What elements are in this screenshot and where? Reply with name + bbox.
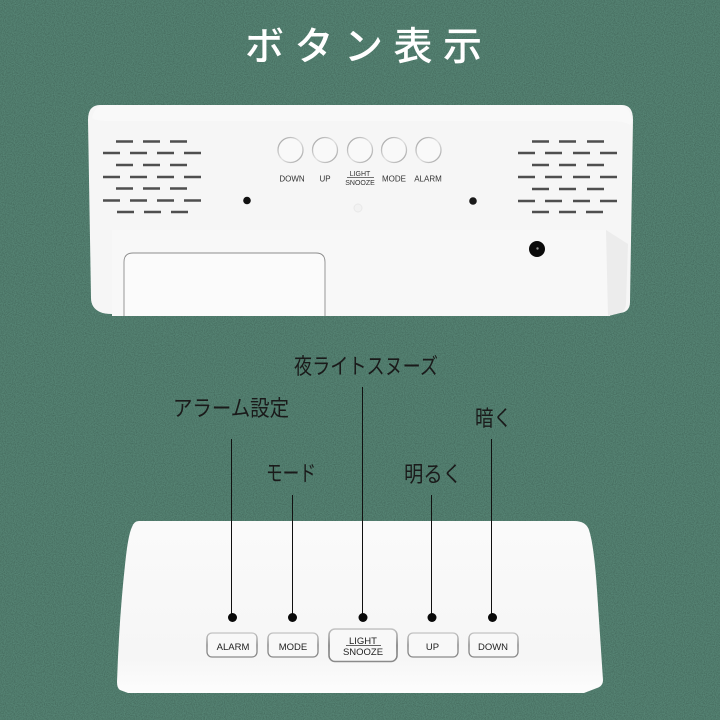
button: down: DOWN <box>478 642 508 653</box>
device body <box>117 521 603 693</box>
title: ボタン表示 <box>245 26 482 69</box>
speaker grille left <box>103 142 201 212</box>
button labels: DOWN <box>279 174 305 184</box>
button: mode <box>268 633 318 657</box>
button: alarm: ALARM <box>217 642 249 653</box>
button: mode: MODE <box>279 642 307 653</box>
small hole left <box>243 197 251 204</box>
power jack <box>529 241 545 257</box>
button labels: SNOOZE <box>345 180 375 187</box>
battery door <box>124 253 325 316</box>
callout dots <box>228 613 497 622</box>
label: bright: 明るく <box>404 462 462 487</box>
label: mode: モード <box>266 461 316 486</box>
button labels: ALARM <box>414 174 442 184</box>
button labels: MODE <box>382 174 406 184</box>
label: alarm setting: アラーム設定 <box>173 396 289 421</box>
panel: clock top view <box>117 521 603 693</box>
label: night light snooze: 夜ライトスヌーズ <box>294 354 438 379</box>
button: up: UP <box>426 642 439 653</box>
device body <box>88 105 633 316</box>
label: dark: 暗く <box>475 406 512 431</box>
panel: clock back view <box>88 105 633 316</box>
button: alarm <box>207 633 257 657</box>
speaker grille right <box>518 142 617 212</box>
button labels: LIGHT <box>350 171 371 178</box>
round buttons <box>278 138 441 162</box>
button: light snooze: SNOOZE <box>343 647 383 658</box>
small hole right <box>469 197 477 205</box>
button: light snooze <box>329 629 397 662</box>
lower stand <box>112 230 610 316</box>
button labels: UP <box>319 174 331 184</box>
button: up <box>408 633 458 657</box>
callout lines <box>232 387 492 617</box>
button: down <box>469 633 518 657</box>
light sensor <box>354 204 362 212</box>
button labels <box>279 171 442 187</box>
button: light snooze: LIGHT <box>349 636 377 647</box>
